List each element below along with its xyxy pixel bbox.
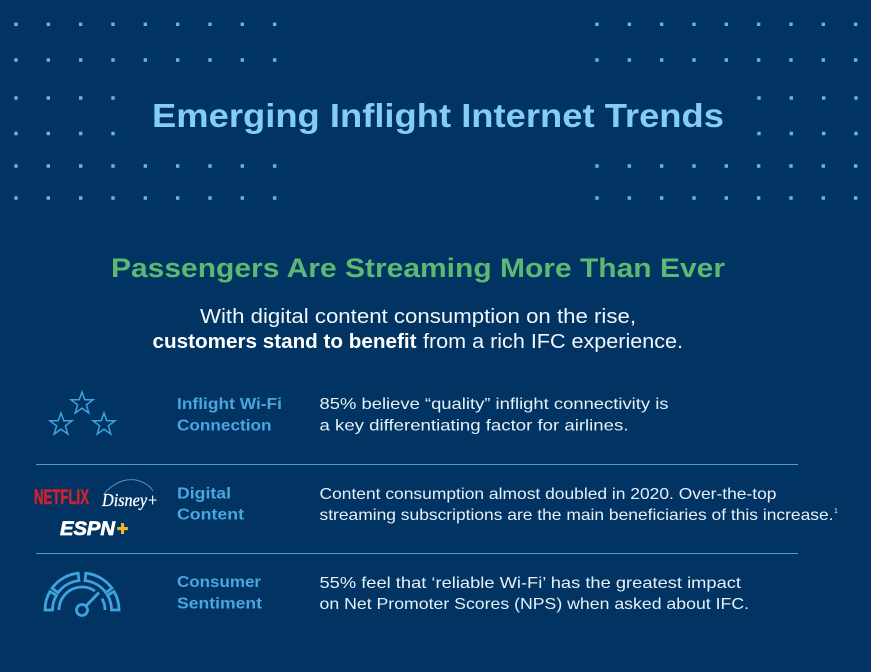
logo: espn plus: ESPN xyxy=(60,519,116,540)
text: reliable wi-fi: 55% feel that ‘reliable Wi-Fi’ has the greatest impact xyxy=(320,575,742,592)
intro text block: from a rich IFC experience. xyxy=(423,331,683,353)
label: inflight wi-fi connection: Inflight Wi-Fi xyxy=(177,396,282,413)
row: digital content xyxy=(34,480,838,540)
logo: netflix: NETFLIX xyxy=(34,486,89,509)
text: content consumption: Content consumption almost doubled in 2020. Over-the-top xyxy=(320,486,777,503)
label: consumer sentiment xyxy=(177,574,263,612)
icon: streaming service logos xyxy=(34,480,158,540)
text: content consumption xyxy=(320,486,838,524)
icon: speedometer gauge xyxy=(45,573,119,616)
label: digital content xyxy=(177,486,245,524)
logo: espn plus: + xyxy=(117,519,128,540)
label: consumer sentiment: Consumer xyxy=(177,574,261,591)
label: inflight wi-fi connection: Connection xyxy=(177,418,272,434)
label: consumer sentiment: Sentiment xyxy=(177,596,263,612)
label: digital content: Digital xyxy=(177,486,231,502)
text: reliable wi-fi xyxy=(320,575,749,613)
text: quality connectivity: 85% believe “quality” inflight connectivity is xyxy=(320,396,668,413)
title: Emerging Inflight Internet Trends xyxy=(152,97,724,134)
text: quality connectivity: a key differentiating factor for airlines. xyxy=(320,418,628,434)
text: content consumption: 1 xyxy=(834,508,838,515)
intro text block xyxy=(152,306,683,353)
text: quality connectivity xyxy=(320,396,668,434)
label: digital content: Content xyxy=(177,506,245,524)
intro text block: customers stand to benefit xyxy=(152,331,417,353)
intro text block: With digital content consumption on the rise, xyxy=(200,306,636,328)
text: content consumption: streaming subscriptions are the main beneficiaries of this increase. xyxy=(320,507,834,524)
label: inflight wi-fi connection xyxy=(177,396,282,434)
row: inflight wi-fi connection xyxy=(50,392,668,434)
row: consumer sentiment xyxy=(45,573,749,616)
heading: passengers streaming: Passengers Are Streaming More Than Ever xyxy=(111,253,726,283)
logo: disney plus: Disney+ xyxy=(101,490,158,510)
icon: three stars xyxy=(50,392,115,434)
text: reliable wi-fi: on Net Promoter Scores (NPS) when asked about IFC. xyxy=(320,596,749,613)
